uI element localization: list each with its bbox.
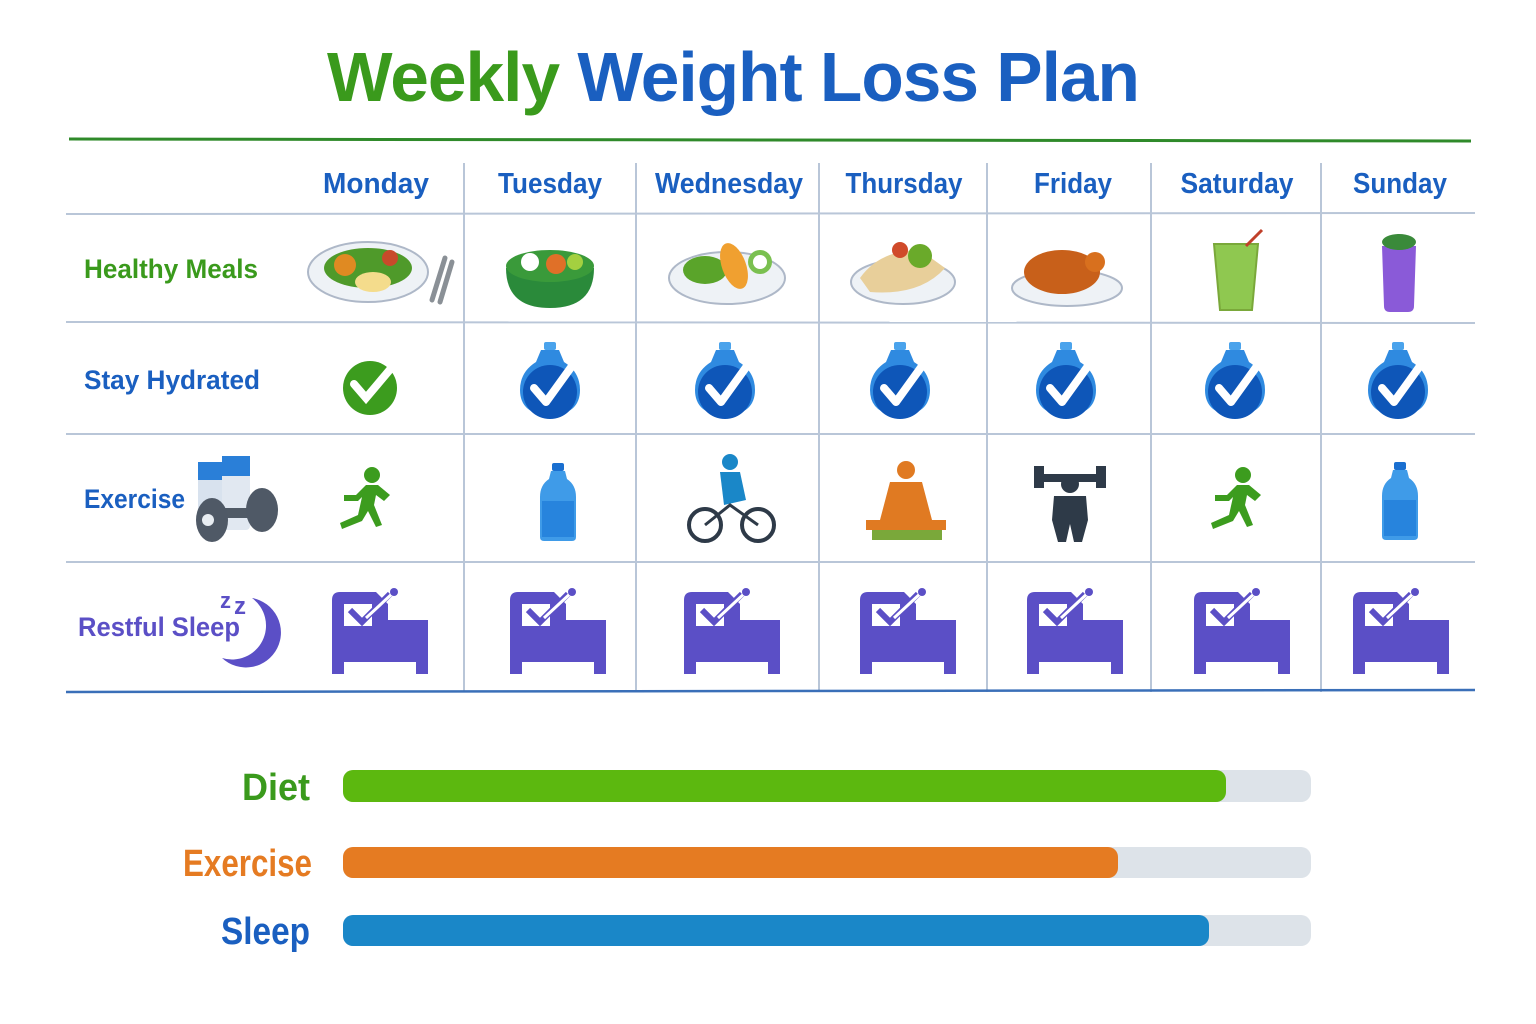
table grid: [66, 163, 1475, 692]
progress bars: [183, 767, 1311, 953]
day headers: Saturday: [1180, 168, 1294, 200]
meals row: [308, 230, 1416, 312]
progress bars: Diet: [242, 767, 310, 809]
day headers: Tuesday: [498, 168, 602, 200]
row labels: Healthy Meals: [84, 254, 258, 284]
exercise row: [340, 454, 1418, 542]
row labels: Stay Hydrated: [84, 365, 260, 395]
row labels: [78, 254, 260, 642]
sleep row: [332, 588, 1449, 674]
title: Weekly Weight Loss Plan: [327, 38, 1139, 116]
icon: moon: z: [220, 588, 231, 613]
day headers: Friday: [1034, 168, 1112, 200]
icon: dumbbell and bottles: [196, 456, 278, 542]
day headers: Wednesday: [655, 168, 803, 200]
icon: moon: [220, 588, 281, 667]
hydration row: [343, 342, 1428, 419]
day headers: Monday: [323, 168, 429, 200]
progress bars: Sleep: [221, 911, 310, 953]
row labels: Restful Sleep: [78, 612, 240, 642]
row labels: Exercise: [84, 484, 185, 514]
day headers: [323, 168, 1447, 200]
progress bars: Exercise: [183, 843, 312, 885]
day headers: Thursday: [846, 168, 962, 200]
day headers: Sunday: [1353, 168, 1447, 200]
icon: moon: z: [234, 593, 246, 620]
